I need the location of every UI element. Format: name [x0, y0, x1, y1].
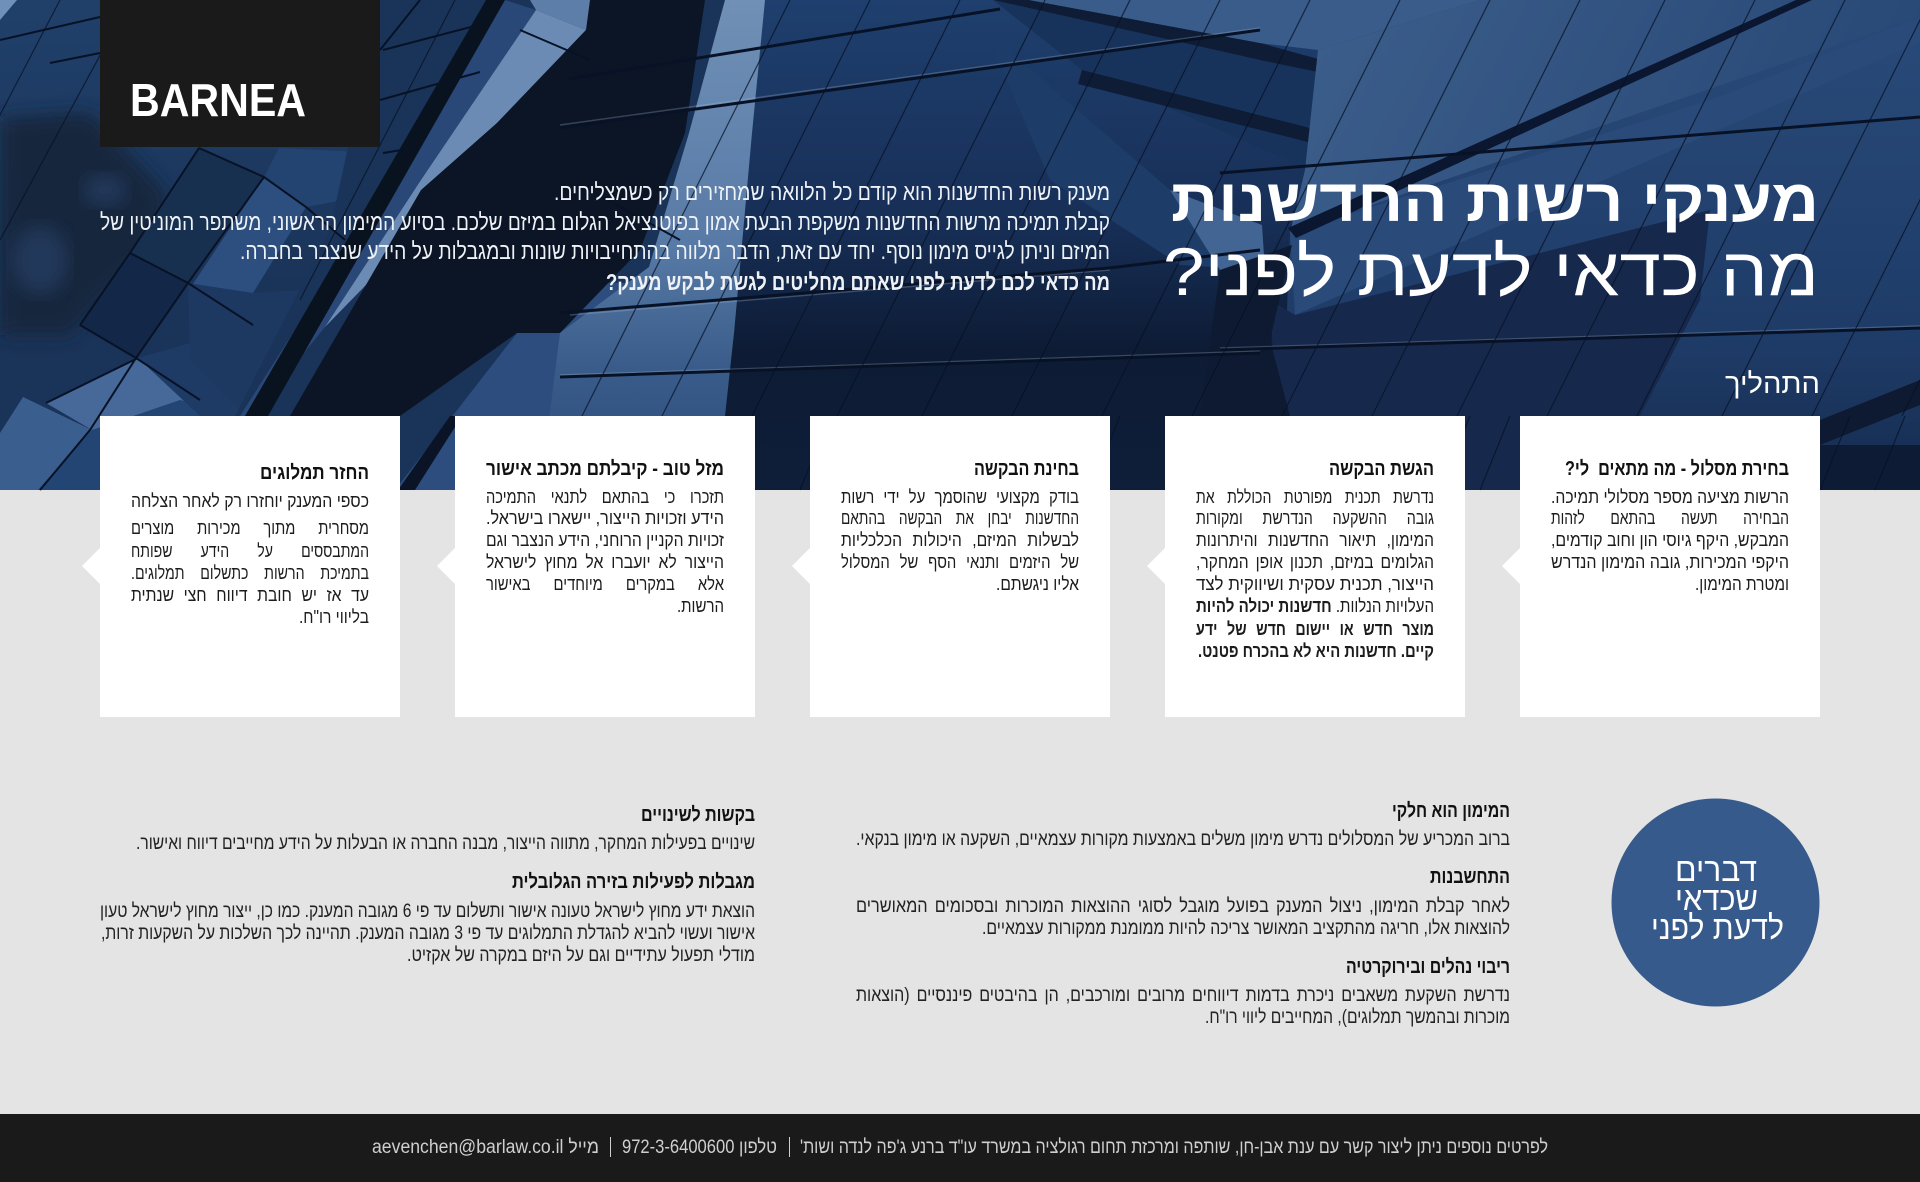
card 2: submitting the request: הגלומים במיזם, תכנון אופן המחקר, — [1196, 552, 1434, 572]
footer bar: מייל aevenchen@barlaw.co.il — [372, 1137, 599, 1158]
card 2: submitting the request: הגשת הבקשה — [1329, 458, 1434, 480]
card 1: route selection: הבחירה תעשה בהתאם לזהות — [1551, 508, 1789, 528]
card 4: approval letter: זכויות הקניין הרוחני, הידע הנצבר וגם — [486, 530, 724, 550]
logo wordmark: BARNEA — [130, 74, 306, 126]
intro text — [100, 179, 1110, 295]
card 3: request review — [792, 416, 1110, 717]
list: partial funding, reckoning, bureaucracy: לאחר קבלת המימון, ניצול המענק בפועל מוגבל לסוגי ההוצאות המוכרות ובסכומים המאושרים — [856, 896, 1510, 917]
list: partial funding, reckoning, bureaucracy: התחשבנות — [1430, 866, 1510, 888]
circle badge: דברים — [1675, 851, 1757, 888]
list: partial funding, reckoning, bureaucracy — [856, 800, 1510, 1028]
card 1: route selection: היקפי המכירות, גובה המימון הנדרש — [1551, 552, 1789, 572]
card 5: royalties repayment — [82, 416, 400, 717]
card 3: request review: בודק מקצועי שהוסמך על ידי רשות — [841, 487, 1079, 507]
card 3: request review: החדשנות יבחן את הבקשה בהתאם — [841, 508, 1079, 528]
card 3: request review: לבשלות המיזם, היכולות הכלכליות — [841, 530, 1079, 550]
card 5: royalties repayment: עד אז יש חובת דיווח חצי שנתית — [131, 585, 369, 605]
card 2: submitting the request: קיים. חדשנות היא לא בהכרח פטנט. — [1198, 641, 1434, 661]
card 5: royalties repayment: בתמיכת הרשות כתשלום תמלוגים. — [131, 563, 369, 583]
list: change requests, global limits: מגבלות לפעילות בזירה הגלובלית — [512, 871, 755, 893]
card 1: route selection: ומטרת המימון. — [1695, 574, 1789, 594]
card 2: submitting the request: הייצור, תכנית עסקית ושיווקית לצד — [1196, 574, 1434, 594]
card 2: submitting the request: גובה ההשקעה הנדרשת ומקורות — [1196, 508, 1434, 528]
card 1: route selection: המבקש, היקף גיוסי הון וחוב קודמים, — [1551, 530, 1789, 550]
card 3: request review: של היזמים ותנאי הסף של המסלול — [841, 552, 1079, 572]
card 2: submitting the request: המימון, תיאור החדשנות והיתרונות — [1196, 530, 1434, 550]
circle badge: לדעת לפני — [1651, 909, 1784, 946]
card 5: royalties repayment: כספי המענק יוחזרו רק לאחר הצלחה — [131, 491, 369, 511]
card 4: approval letter: אלא במקרים מיוחדים באישור — [486, 574, 725, 594]
hero: glass building photo — [0, 0, 1920, 490]
list: change requests, global limits — [100, 804, 755, 966]
list: change requests, global limits: אישור ועשוי להביא להגדלת התמלוגים עד פי 3 מגובה המענק. תהיינה לכך השלכות על השקעות זרות, — [101, 923, 755, 944]
title: מענקי רשות החדשנות — [1171, 167, 1819, 234]
list: partial funding, reckoning, bureaucracy: ריבוי נהלים ובירוקרטיה — [1346, 956, 1510, 978]
intro text: קבלת תמיכה מרשות החדשנות משקפת הבעת אמון בפוטנציאל הגלום במיזם שלכם. בסיוע המימון הראשוני, משתפר המוניטין של — [100, 209, 1110, 235]
card 5: royalties repayment: החזר תמלוגים — [260, 462, 369, 484]
card 5: royalties repayment: בליווי רו"ח. — [299, 607, 369, 627]
list: change requests, global limits: שינויים בפעילות המחקר, מתווה הייצור, מבנה החברה או הבעלות על הידע מחייבים דיווח ואישור. — [136, 833, 755, 854]
card 2: submitting the request: מוצר חדש או יישום חדש של ידע — [1196, 619, 1434, 639]
footer bar — [0, 1114, 1920, 1182]
card 5: royalties repayment: מסחרית מתוך מכירות מוצרים — [131, 518, 369, 538]
card 1: route selection — [1502, 416, 1820, 717]
card 5: royalties repayment: המתבססים על הידע שפותח — [131, 541, 369, 561]
card 4: approval letter: הידע וזכויות הייצור, יישארו בישראל. — [486, 508, 724, 528]
circle badge: שכדאי — [1675, 880, 1758, 917]
card 2: submitting the request: העלויות הנלוות. חדשנות יכולה להיות — [1196, 596, 1434, 616]
circle badge — [1612, 798, 1820, 1006]
list: partial funding, reckoning, bureaucracy: להוצאות אלו, חריגה מהתקציב המאושר צריכה להיות ממומנת ממקורות עצמאיים. — [982, 918, 1510, 939]
title: מה כדאי לדעת לפני? — [1163, 234, 1819, 310]
list: change requests, global limits: הוצאת ידע מחוץ לישראל טעונה אישור ותשלום עד פי 6 מגובה המענק. כמו כן, ייצור מחוץ לישראל טעון — [100, 901, 755, 922]
card 1: route selection: הרשות מציעה מספר מסלולי תמיכה. — [1551, 487, 1789, 507]
card 4: approval letter: הרשות. — [677, 596, 724, 616]
list: partial funding, reckoning, bureaucracy: המימון הוא חלקי — [1392, 800, 1510, 822]
list: partial funding, reckoning, bureaucracy: מוכרות ובהמשך תמלוגים), המחייבים ליווי רו"ח. — [1205, 1007, 1510, 1028]
intro text: מה כדאי לכם לדעת לפני שאתם מחליטים לגשת לבקש מענק? — [606, 269, 1110, 295]
intro text: המיזם וניתן לגייס מימון נוסף. יחד עם זאת, הדבר מלווה בהתחייבויות שונות ובמגבלות על הידע שנצבר בחברה. — [240, 238, 1110, 264]
card 4: approval letter: הייצור לא יועברו אל מחוץ לישראל — [486, 552, 724, 572]
card 4: approval letter: מזל טוב - קיבלתם מכתב אישור — [486, 458, 724, 480]
list: change requests, global limits: מודלי תפעול עתידיים וגם על היזם במקרה של אקזיט. — [407, 945, 755, 966]
card 2: submitting the request — [1147, 416, 1465, 717]
footer bar: טלפון 972-3-6400600 — [622, 1137, 777, 1158]
card 3: request review: אליו ניגשתם. — [996, 574, 1080, 594]
card 4: approval letter: תזכרו כי בהתאם לתנאי התמיכה — [486, 487, 724, 507]
title — [1163, 167, 1819, 310]
list: change requests, global limits: בקשות לשינויים — [641, 804, 755, 826]
card 3: request review: בחינת הבקשה — [974, 458, 1079, 480]
card 1: route selection: בחירת מסלול - מה מתאים לי? — [1565, 458, 1789, 480]
intro text: מענק רשות החדשנות הוא קודם כל הלוואה שמחזירים רק כשמצליחים. — [554, 179, 1110, 205]
process heading: התהליך — [1725, 368, 1820, 399]
list: partial funding, reckoning, bureaucracy: ברוב המכריע של המסלולים נדרש מימון משלים באמצעות מקורות עצמאיים, השקעה או מימון בנקאי. — [856, 829, 1510, 850]
logo box — [100, 0, 380, 147]
footer bar: לפרטים נוספים ניתן ליצור קשר עם ענת אבן-חן, שותפה ומרכזת תחום רגולציה במשרד עו"ד ברנע ג'פה לנדה ושות' — [800, 1137, 1548, 1158]
card 4: approval letter — [437, 416, 755, 717]
list: partial funding, reckoning, bureaucracy: נדרשת השקעת משאבים ניכרת בדמות דיווחים מרובים ומורכבים, הן בהיבטים פיננסיים (הוצאות — [856, 985, 1510, 1006]
card 2: submitting the request: נדרשת תכנית מפורטת הכוללת את — [1196, 487, 1434, 507]
